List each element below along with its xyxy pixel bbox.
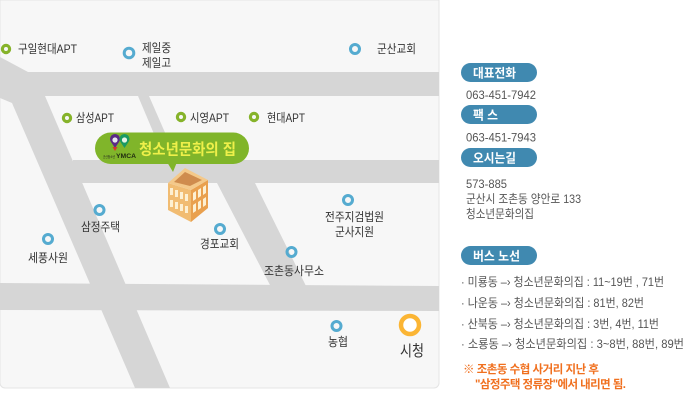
marker: 세풍사원: [28, 234, 68, 265]
text: phone number: 063-451-7942: [466, 88, 536, 102]
marker: 삼정주택: 삼정주택: [81, 220, 120, 234]
callout: 청소년문화의 집: 청소년문화의 집: [139, 140, 236, 158]
marker: 현대APT: 현대APT: [267, 111, 306, 125]
marker: 시영APT: [177, 111, 230, 125]
icon: YMCA logo: 군산청소년: [103, 154, 115, 159]
callout: 청소년문화의 집: [95, 132, 249, 172]
marker: 군산교회: 군산교회: [377, 42, 416, 56]
marker: 농협: [328, 322, 348, 349]
marker: 경포교회: [200, 224, 239, 251]
marker: 세풍사원: 세풍사원: [28, 251, 68, 265]
heading: 오시는길: [461, 148, 537, 167]
heading: 팩스: 팩 스: [473, 108, 498, 122]
marker: 군산교회: [350, 42, 416, 56]
heading: 팩스: [461, 105, 537, 124]
marker: 현대APT: [250, 111, 306, 125]
marker: 경포교회: 경포교회: [200, 237, 239, 251]
text: address: 573-885: [466, 177, 507, 191]
heading: 대표전화: 대표전화: [473, 66, 516, 80]
text: fax number: 063-451-7943: [466, 130, 536, 144]
roads: [0, 57, 439, 388]
marker: 구일현대APT: 구일현대APT: [18, 42, 78, 56]
text: bus routes: · 나운동 –› 청소년문화의집 : 81번, 82번: [461, 296, 644, 310]
heading: 버스 노선: [461, 246, 537, 265]
panel: contact info: [461, 63, 684, 391]
marker: 제일중 제일고: 제일중: [142, 41, 171, 55]
text: bus routes: · 소룡동 –› 청소년문화의집 : 3~8번, 88번, 89번: [461, 337, 684, 351]
icon: building: [168, 168, 208, 222]
marker: 삼정주택: [81, 206, 120, 234]
marker: 시청: 시청: [400, 342, 424, 360]
note: bus stop directions: ※ 조촌동 수협 사거리 지난 후: [463, 362, 599, 376]
marker: 조촌동사무소: 조촌동사무소: [264, 264, 324, 278]
marker: 제일중 제일고: 제일고: [142, 56, 171, 70]
text: address: 청소년문화의집: [466, 207, 534, 221]
icon: YMCA logo: [103, 134, 136, 160]
marker: 삼성APT: 삼성APT: [76, 111, 115, 125]
panel: map: [0, 0, 439, 388]
heading: 버스 노선: 버스 노선: [473, 250, 520, 264]
text: bus routes: · 산북동 –› 청소년문화의집 : 3번, 4번, 11번: [461, 317, 659, 331]
text: address: 군산시 조촌동 양안로 133: [466, 192, 581, 206]
marker: 시영APT: 시영APT: [190, 111, 230, 125]
marker: 전주지검법원 군사지원: 군사지원: [335, 225, 374, 239]
icon: YMCA logo: YMCA: [116, 153, 136, 160]
marker: 시청: [400, 316, 424, 360]
marker: 조촌동사무소: [264, 248, 324, 278]
note: bus stop directions: [463, 362, 626, 391]
marker: 삼성APT: [63, 111, 115, 125]
text: bus routes: · 미룡동 –› 청소년문화의집 : 11~19번 , 71번: [461, 275, 664, 289]
marker: 전주지검법원 군사지원: [325, 196, 384, 239]
note: bus stop directions: "삼정주택 정류장"에서 내리면 됨.: [475, 377, 626, 391]
marker: 제일중 제일고: [124, 41, 171, 70]
marker: 전주지검법원 군사지원: 전주지검법원: [325, 210, 384, 224]
text: address: [466, 177, 581, 221]
text: bus routes: [461, 275, 684, 351]
marker: 농협: 농협: [328, 335, 348, 349]
heading: 오시는길: 오시는길: [473, 152, 516, 166]
heading: 대표전화: [461, 63, 537, 82]
